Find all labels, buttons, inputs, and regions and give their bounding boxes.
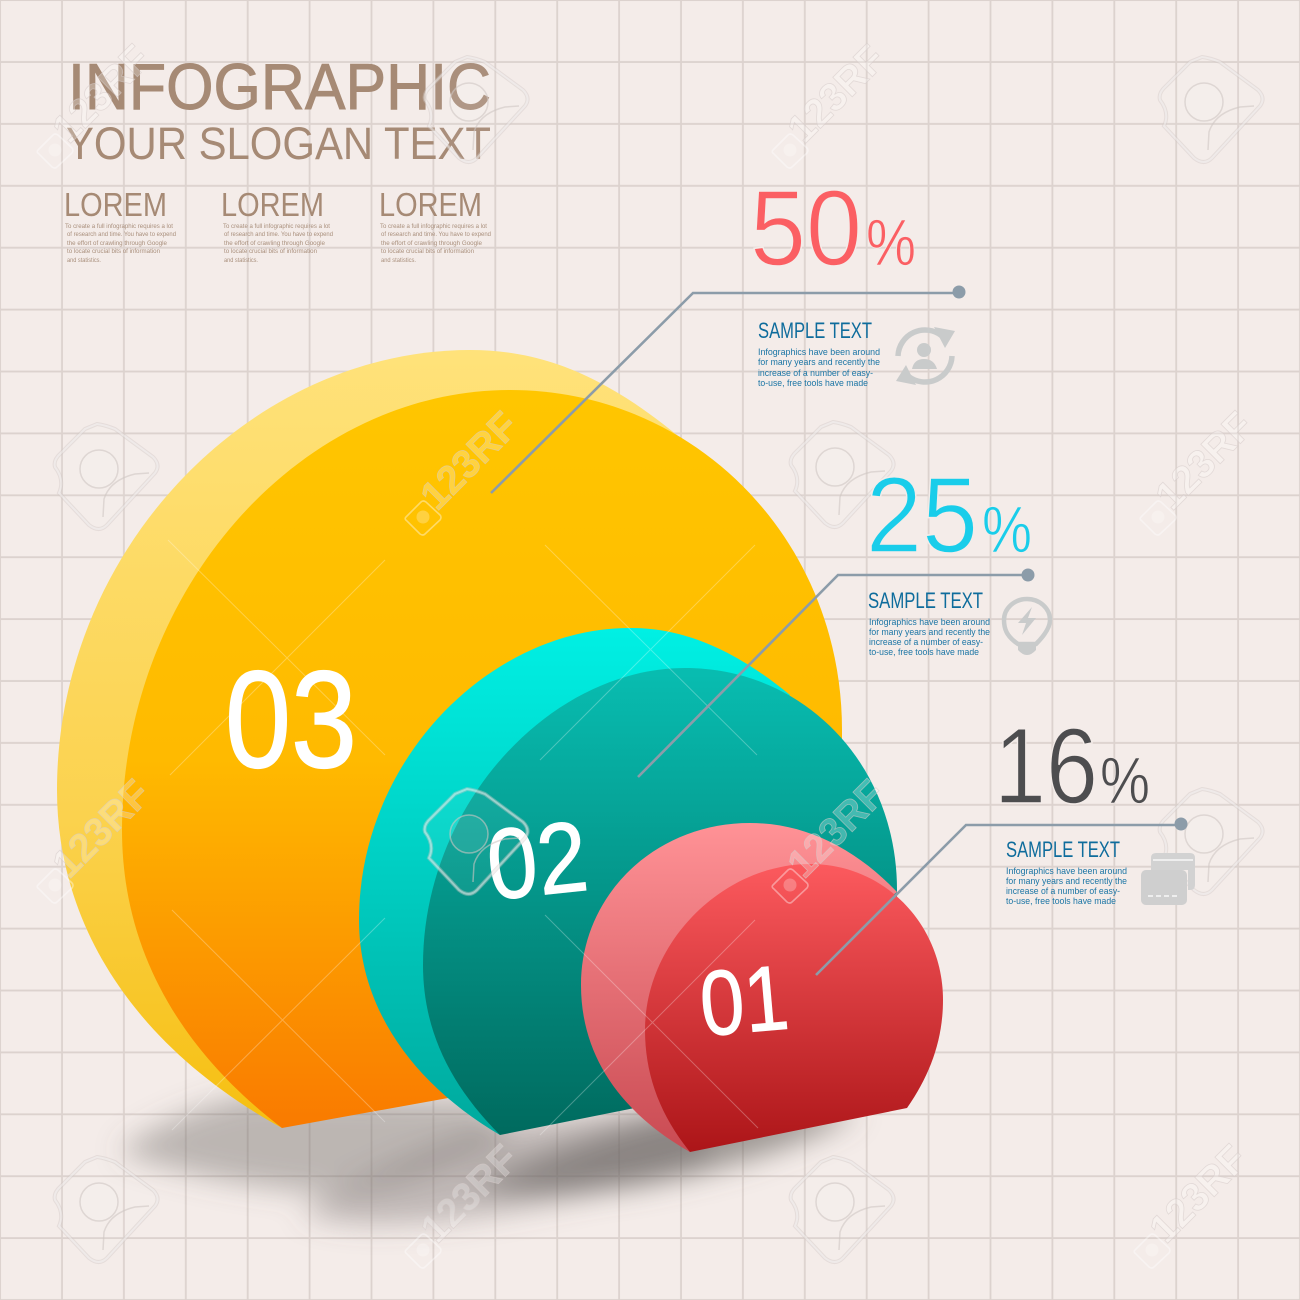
text block 1: SAMPLE TEXT [758,318,872,343]
lorem column 3: the effort of crawling through Google [381,241,483,247]
text block 1: increase of a number of easy- [758,367,873,378]
text block 2: to-use, free tools have made [869,646,979,657]
stat 16%: % [1100,743,1150,817]
lorem column 1 [64,186,176,264]
title: INFOGRAPHIC [68,50,491,123]
lorem column 3: LOREM [379,186,482,223]
stat 50%: % [866,205,916,279]
lorem column 1: LOREM [64,186,167,223]
stat 16%: 16 [994,705,1098,826]
text block 3: Infographics have been around [1006,865,1127,876]
lorem column 3 [379,186,491,264]
callout line 25% [638,568,1034,777]
text block 2: Infographics have been around [869,616,990,627]
label 02: 02 [482,800,593,922]
text block 3 [1006,837,1127,906]
callout line 50% [491,286,966,493]
slogan: YOUR SLOGAN TEXT [66,118,491,169]
lorem column 2: and statistics. [224,258,258,264]
callout line 16% [816,818,1188,975]
text block 1 [758,318,880,388]
lorem column 1: to locate crucial bits of information [67,249,160,255]
lorem column 3: of research and time. You have to expend [381,232,491,238]
stat 25%: 25 [866,454,978,575]
text block 1: to-use, free tools have made [758,377,868,388]
label 03: 03 [225,643,357,797]
lorem column 3: to locate crucial bits of information [381,249,474,255]
lorem column 2 [221,186,333,264]
icon: cards [1141,853,1195,905]
lorem column 3: To create a full infographic requires a lot [380,224,487,230]
chart: yellow 03 [57,350,842,1128]
icon: refresh user [896,327,955,385]
stat 50%: 50 [750,167,862,288]
lorem column 2: to locate crucial bits of information [224,249,317,255]
lorem column 2: the effort of crawling through Google [224,241,326,247]
lorem column 3: and statistics. [381,258,416,264]
text block 3: to-use, free tools have made [1006,895,1116,906]
lorem column 1: and statistics. [67,258,101,264]
ground shadow [118,1095,860,1224]
text block 2: SAMPLE TEXT [868,588,983,613]
text block 2: increase of a number of easy- [869,636,983,647]
label 01: 01 [696,947,792,1056]
text block 3: SAMPLE TEXT [1006,837,1120,862]
lorem column 1: the effort of crawling through Google [67,241,168,247]
text block 1: for many years and recently the [758,356,880,367]
text block 2: for many years and recently the [869,626,990,637]
icon: light bulb [1004,599,1050,655]
lorem column 1: To create a full infographic requires a lot [65,224,173,230]
lorem column 2: LOREM [221,186,324,223]
chart: red 01 [581,823,943,1152]
text block 2 [868,588,990,657]
lorem column 2: To create a full infographic requires a lot [223,224,330,230]
lorem column 2: of research and time. You have to expend [224,232,333,238]
text block 3: increase of a number of easy- [1006,885,1120,896]
stat 25%: % [982,492,1032,566]
lorem column 1: of research and time. You have to expend [67,232,176,238]
chart: teal 02 [359,628,897,1135]
text block 1: Infographics have been around [758,346,880,357]
text block 3: for many years and recently the [1006,875,1127,886]
